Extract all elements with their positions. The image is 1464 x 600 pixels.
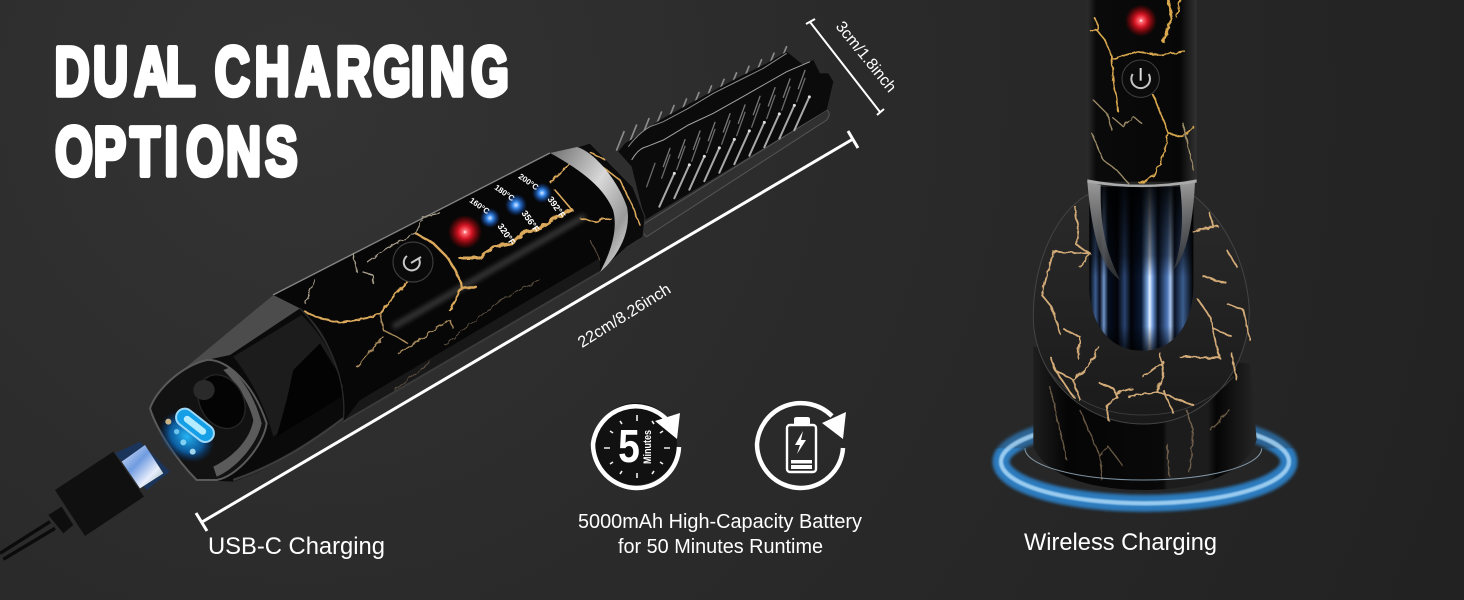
battery caption: for 50 Minutes Runtime [618,536,823,558]
icon: 5 minutes clock: 5 [618,421,640,473]
title: OPTIONS [55,112,298,190]
pedestal veins [1050,387,1230,480]
temperature indicators [393,172,568,282]
icon: 5 minutes clock: Minutes [642,430,654,464]
handle veins [1092,0,1193,183]
temperature indicators: 356°F [519,209,542,234]
wireless charging stand [1001,0,1289,503]
width label: 3cm/1.8inch [832,18,899,96]
width dimension line [806,19,884,115]
dome plate [1033,195,1249,424]
charging ring back [1001,420,1289,503]
title [0,32,509,190]
battery caption: 5000mAh High-Capacity Battery [578,511,862,533]
icon: 5 minutes clock [593,403,680,488]
silver collar ring [550,147,628,272]
title: DUAL CHARGING [0,32,509,110]
temperature indicators: 180°C [493,183,516,203]
handle [1087,0,1197,182]
length dimension line [196,131,858,531]
gold veins [305,152,640,390]
silver side pieces [1087,182,1120,280]
charging ring front [992,448,1298,514]
USB-C caption: USB-C Charging [208,533,385,560]
comb head with bristles [617,47,833,237]
wireless caption: Wireless Charging [1024,529,1217,556]
length label: 22cm/8.26inch [575,281,674,351]
brush barrel with marble veins [273,143,645,422]
temperature indicators: 160°C [468,196,491,216]
USB-C cable [0,442,170,559]
blue lit tube [1089,187,1193,351]
pedestal [1033,347,1257,490]
icon: power button [393,242,433,282]
base veins [1042,207,1250,420]
red LED [1125,5,1157,37]
temperature indicators: 320°F [495,222,518,247]
battery caption [578,511,862,558]
temperature indicators: 200°C [517,172,540,192]
brush end cap and USB-C port [149,295,344,482]
power button [1122,60,1159,97]
icon: battery recharge [757,403,846,488]
temperature indicators: 392°F [545,195,568,220]
